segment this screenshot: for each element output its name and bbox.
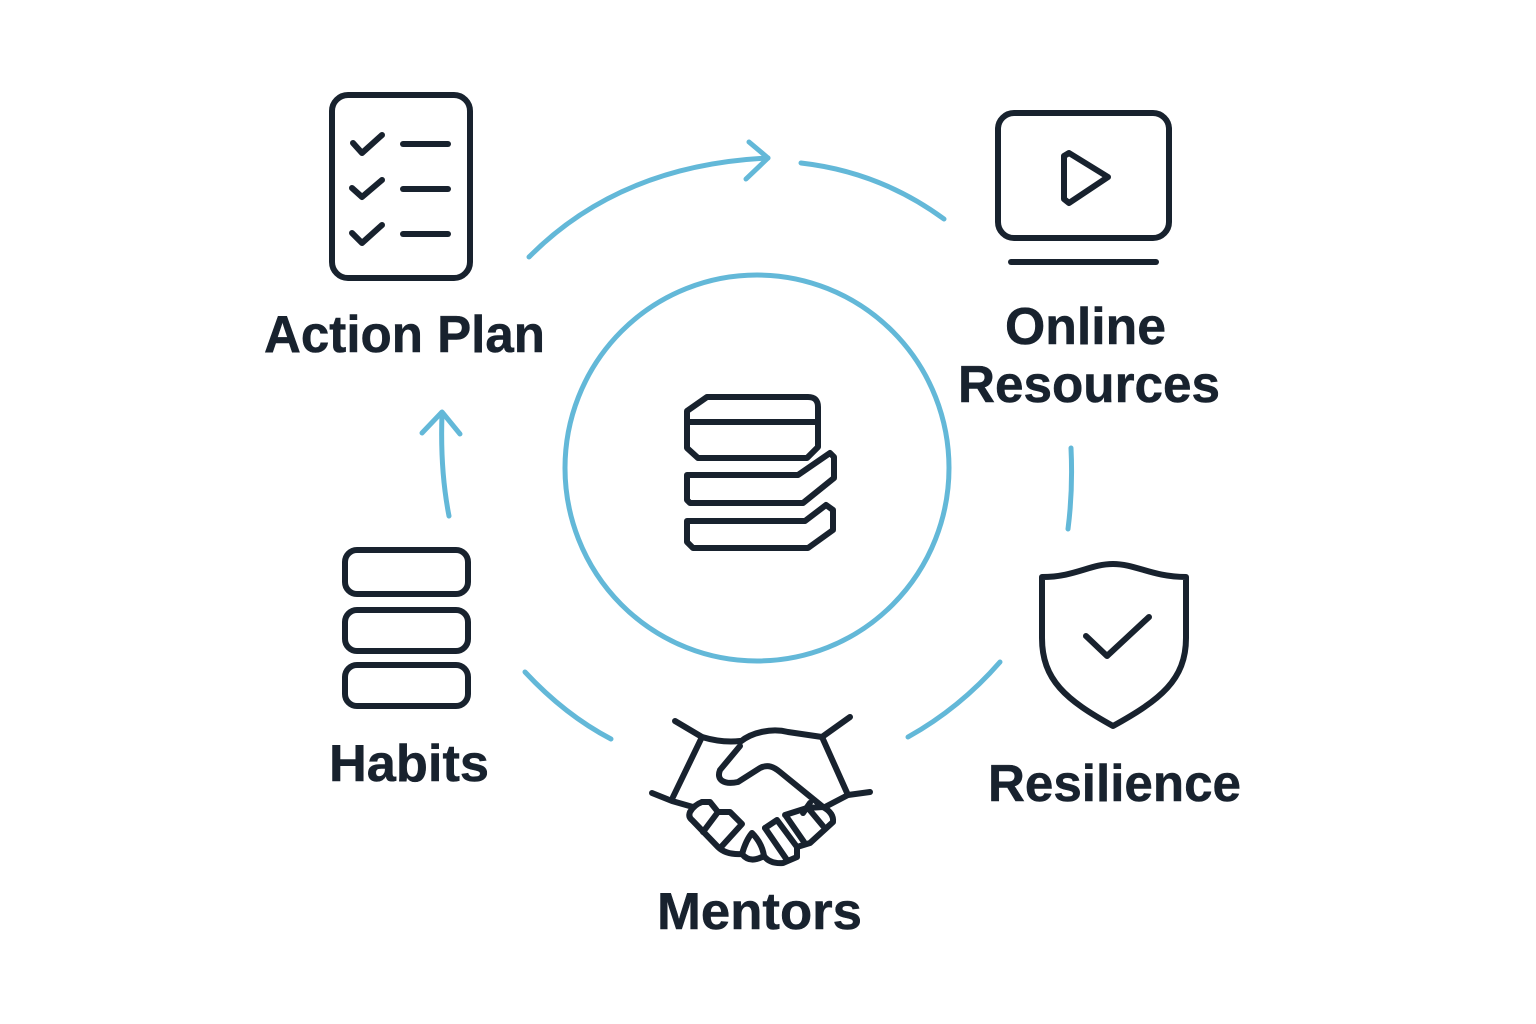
heading: Mentors: Mentors: [657, 883, 862, 941]
arrow: habits to action plan: [422, 412, 460, 516]
arc: resilience to mentors: [908, 662, 1000, 737]
icon: video screen: [998, 113, 1169, 262]
heading: Online Resources: Resources: [958, 356, 1220, 414]
heading: Online Resources: [958, 298, 1220, 414]
arc: online resources to resilience: [1068, 448, 1072, 529]
heading: Online Resources: Online: [1005, 298, 1166, 356]
icon: shield with check: [1042, 564, 1186, 726]
arc: mentors to habits: [525, 672, 611, 739]
icon: stacked bars: [345, 550, 468, 706]
arc: online resources connector: [801, 163, 944, 219]
icon: handshake: [652, 717, 870, 863]
heading: Action Plan: Action Plan: [264, 306, 545, 364]
icon: central stack: [687, 397, 834, 548]
arrow: action plan to online resources: [529, 142, 768, 257]
icon: checklist: [332, 95, 470, 278]
heading: Habits: Habits: [329, 735, 489, 793]
heading: Resilience: Resilience: [988, 755, 1241, 813]
central circle: [565, 275, 949, 661]
